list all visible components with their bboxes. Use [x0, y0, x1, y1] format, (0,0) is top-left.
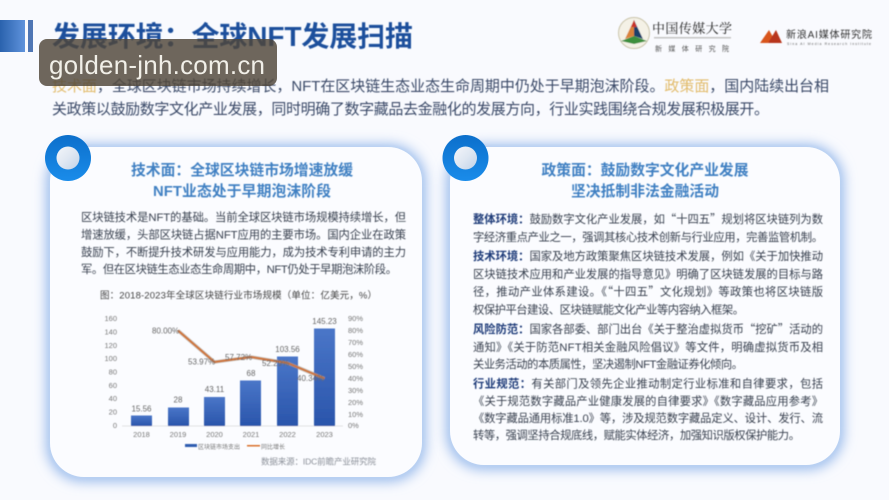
industry norms: 《数字藏品通用标准1.0》等，涉及规范数字藏品定义、设计、发行、流 — [473, 411, 823, 425]
industry norms: 行业规范：有关部门及领先企业推动制定行业标准和自律要求，包括 — [473, 376, 823, 390]
panel heading — [131, 161, 353, 200]
technology environment: 技术环境：国家及地方政策聚焦区块链技术发展，例如《关于加快推动 — [473, 249, 823, 263]
English name line: Sina AI Media Research Institute — [787, 42, 871, 46]
right axis labels: 50% — [348, 362, 363, 371]
title: 发展环境：全球NFT发展扫描 — [52, 21, 413, 52]
industry norms — [473, 376, 823, 442]
right axis labels — [348, 314, 363, 430]
header accent: blue square and bar — [0, 20, 33, 52]
x axis labels: 2019 — [170, 430, 186, 439]
overall environment — [473, 211, 823, 244]
icon: ring badge — [442, 135, 488, 181]
panel card — [50, 147, 422, 477]
right axis labels: 90% — [348, 314, 363, 323]
growth value labels — [152, 326, 324, 383]
left axis labels: 100 — [104, 354, 117, 363]
bar value labels: 145.23 — [312, 317, 337, 326]
data source: 数据来源：IDC前瞻产业研究院 — [261, 456, 376, 466]
right axis labels: 70% — [348, 338, 363, 347]
risk prevention — [473, 321, 823, 371]
growth value labels: 80.00% — [152, 326, 179, 336]
growth value labels: 57.72% — [225, 353, 252, 362]
panel body text — [81, 210, 406, 276]
left axis labels: 20 — [109, 408, 117, 416]
panel body text: 区块链技术是NFT的基础。当前全球区块链市场规模持续增长，但 — [81, 210, 406, 224]
left axis labels — [104, 314, 117, 430]
left axis labels: 60 — [109, 381, 117, 390]
panel body text: 增速放缓，头部区块链占据NFT应用的主要市场。国内企业在政策 — [81, 228, 406, 242]
x axis labels: 2022 — [279, 430, 296, 439]
right axis labels: 40% — [348, 374, 363, 383]
bar value labels: 28 — [174, 396, 183, 404]
legend: 区块链市场支出 — [198, 443, 240, 451]
English name line — [654, 37, 731, 38]
right axis labels: 0% — [348, 421, 359, 430]
intro paragraph — [52, 77, 829, 118]
panel body text: 军。但在区块链生态业态生命周期中，NFT仍处于早期泡沫阶段。 — [81, 262, 397, 276]
icon: ring badge — [45, 135, 91, 181]
left axis labels: 160 — [104, 314, 117, 323]
overall environment: 字经济重点产业之一，强调其核心技术创新与行业应用，完善监管机制。 — [473, 230, 823, 244]
industry norms: 《关于规范数字藏品产业健康发展的自律要求》《数字藏品应用参考》 — [473, 394, 823, 408]
x axis labels: 2020 — [206, 430, 223, 439]
university name: 中国传媒大学 — [652, 18, 732, 37]
logo: Communication University of China — [618, 18, 732, 53]
right axis labels: 20% — [348, 398, 363, 407]
x axis labels: 2018 — [133, 430, 150, 439]
bars — [131, 328, 335, 426]
panel heading: 坚决抵制非法金融活动 — [571, 182, 719, 200]
bar value labels: 103.56 — [275, 345, 300, 354]
technology environment — [473, 249, 823, 316]
left axis labels: 0 — [113, 421, 117, 430]
panel edge — [49, 146, 423, 478]
logo: Sina AI Media Research Institute — [760, 28, 872, 46]
panel glow — [446, 144, 844, 470]
bar chart: blockchain market size with growth line — [104, 314, 363, 451]
x axis labels: 2021 — [243, 430, 259, 439]
panel body text: 鼓励下，不断提升技术研发与应用能力，成为技术专利申请的主力 — [81, 245, 406, 259]
intro paragraph: 技术面，全球区块链市场持续增长，NFT在区块链生态业态生命周期中仍处于早期泡沫阶段。政策面，国内陆续出台相 — [52, 77, 829, 95]
technology environment: 径，推动产业体系建设。《“十四五”文化规划》等政策也将区块链版 — [473, 284, 823, 300]
risk prevention: 风险防范：国家各部委、部门出台《关于整治虚拟货币“挖矿”活动的 — [473, 321, 823, 337]
panel card — [450, 147, 840, 465]
bar value labels — [131, 317, 337, 414]
panel heading: 技术面：全球区块链市场增速放缓 — [131, 161, 353, 179]
overall environment: 整体环境：鼓励数字文化产业发展，如“十四五”规划将区块链列为数 — [473, 211, 823, 227]
baseline — [122, 425, 343, 427]
left axis labels: 140 — [104, 328, 117, 336]
legend — [185, 443, 285, 451]
risk prevention: 通知》《关于防范NFT相关金融风险倡议》等文件，明确虚拟货币及相 — [473, 340, 823, 354]
industry norms: 转等，强调坚持合规底线，赋能实体经济，加强知识版权保护能力。 — [473, 428, 800, 442]
bar value labels: 68 — [247, 369, 256, 378]
bar value labels: 43.11 — [205, 385, 225, 394]
right axis labels: 10% — [348, 410, 363, 419]
panel heading: 政策面：鼓励数字文化产业发展 — [542, 161, 749, 179]
left axis labels: 120 — [104, 341, 117, 350]
legend: 同比增长 — [261, 443, 285, 451]
panel: policy — [442, 135, 844, 470]
left axis labels: 80 — [109, 368, 117, 376]
right axis labels: 30% — [348, 386, 363, 395]
growth line — [178, 330, 324, 378]
bar value labels: 15.56 — [131, 404, 152, 414]
growth value labels: 40.34% — [297, 374, 324, 383]
right axis labels: 80% — [348, 326, 363, 335]
growth value labels: 53.97% — [188, 358, 215, 366]
risk prevention: 关业务活动的本质属性，坚决遏制NFT金融证券化倾向。 — [473, 357, 743, 371]
watermark — [39, 39, 277, 86]
icon: red-orange peaks — [760, 30, 782, 43]
technology environment: 权保护平台建设、区块链赋能文化产业等内容纳入框架。 — [473, 302, 744, 316]
technology environment: 区块链技术应用和产业发展的指导意见》明确了区块链发展的目标与路 — [473, 267, 823, 281]
watermark: golden-jnh.com.cn — [49, 50, 265, 80]
x axis labels — [133, 430, 333, 439]
panel glow — [46, 144, 426, 482]
growth value labels: 52.29% — [262, 359, 289, 368]
institute name: 新浪AI媒体研究院 — [786, 28, 872, 41]
panel heading — [542, 161, 749, 200]
icon: university emblem — [618, 18, 650, 48]
panel edge — [449, 146, 841, 466]
x axis labels: 2023 — [316, 430, 333, 439]
right axis labels: 60% — [348, 350, 363, 359]
chart title: 图：2018-2023年全球区块链行业市场规模（单位：亿美元，%） — [100, 290, 377, 302]
panel heading: NFT业态处于早期泡沫阶段 — [153, 182, 331, 200]
left axis labels: 40 — [109, 394, 117, 403]
intro paragraph: 关政策以鼓励数字文化产业发展，同时明确了数字藏品去金融化的发展方向，行业实践围绕合规发展积极展开。 — [52, 101, 769, 118]
institute name: 新媒体研究院 — [655, 44, 729, 53]
panel: technology — [45, 135, 426, 482]
